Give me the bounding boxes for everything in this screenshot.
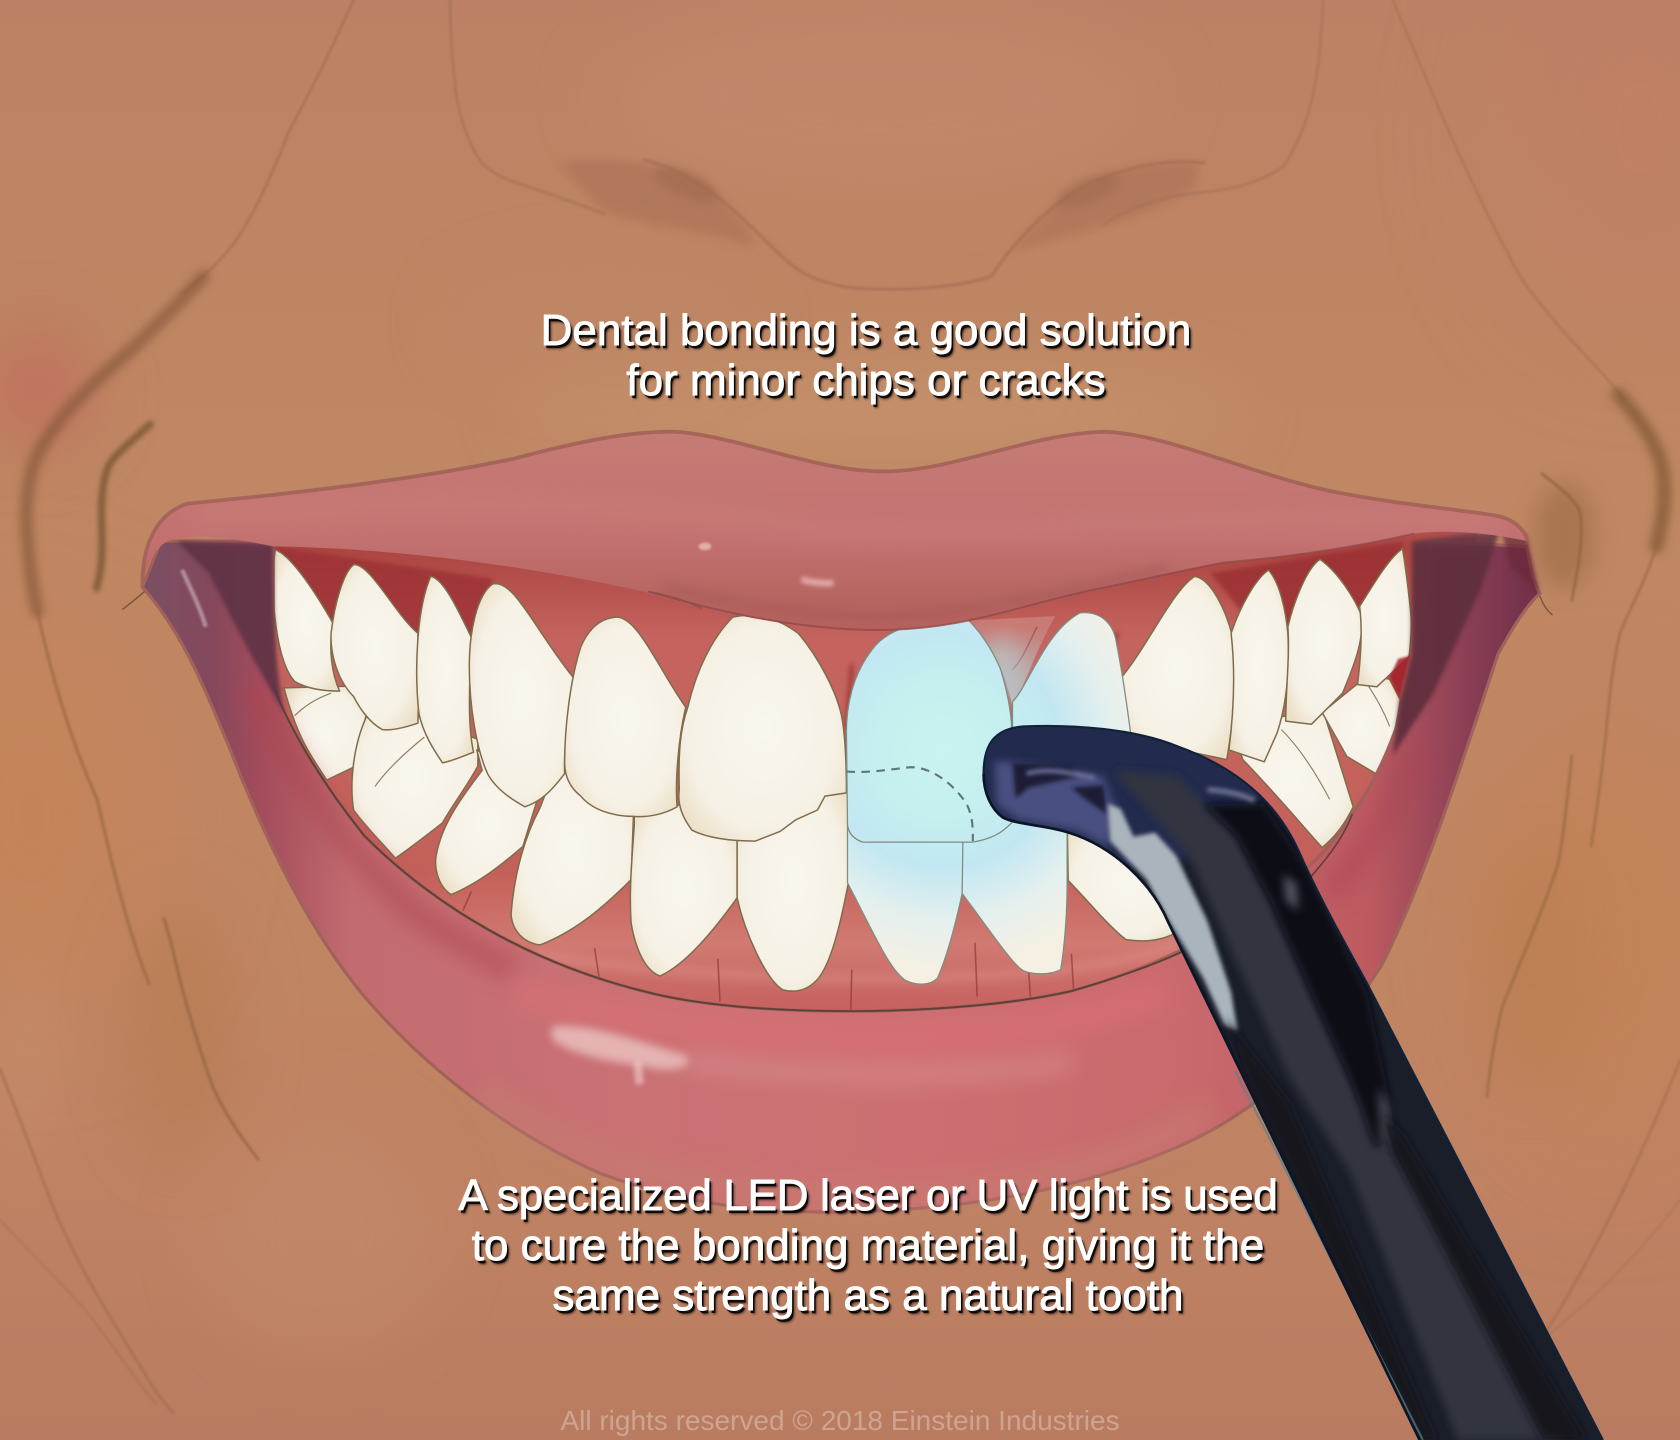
wand tip blue reflection [994,761,1116,846]
chipped front tooth [679,615,846,841]
copyright: All rights reserved © 2018 Einstein Industries [560,1405,1120,1436]
caption: curing light: A specialized LED laser or UV light is used [458,1171,1278,1220]
caption: dental bonding: for minor chips or cracks [626,356,1106,405]
wand charcoal band [1114,771,1564,1440]
upper teeth [273,549,1411,817]
curing light wand [964,707,1629,1440]
right mouth corner shadow [1390,525,1540,755]
caption: curing light [458,1171,1280,1324]
nose outline and nostrils [450,0,1323,289]
upper lip [122,432,1553,630]
dashed line showing restored tooth edge [846,767,973,841]
gums [214,525,1479,1029]
caption: curing light: to cure the bonding material, giving it the [472,1221,1264,1270]
wand dark strip on right edge [1382,1114,1586,1440]
lower lip [142,541,1540,1212]
caption: dental bonding [541,306,1193,410]
wand black blotch [1203,804,1394,1149]
caption: dental bonding: Dental bonding is a good solution [541,306,1191,355]
lower teeth [284,675,1400,991]
caption: curing light: same strength as a natural tooth [552,1271,1184,1320]
lower tooth ridge lines [295,686,1390,799]
wand light reflection stripe [1108,804,1238,1031]
wand dark strip on lower left [1225,1018,1436,1440]
wand tip navy [984,727,1264,869]
glowing bonded teeth under curing light [846,613,1136,984]
left mouth corner shadow [177,541,284,712]
